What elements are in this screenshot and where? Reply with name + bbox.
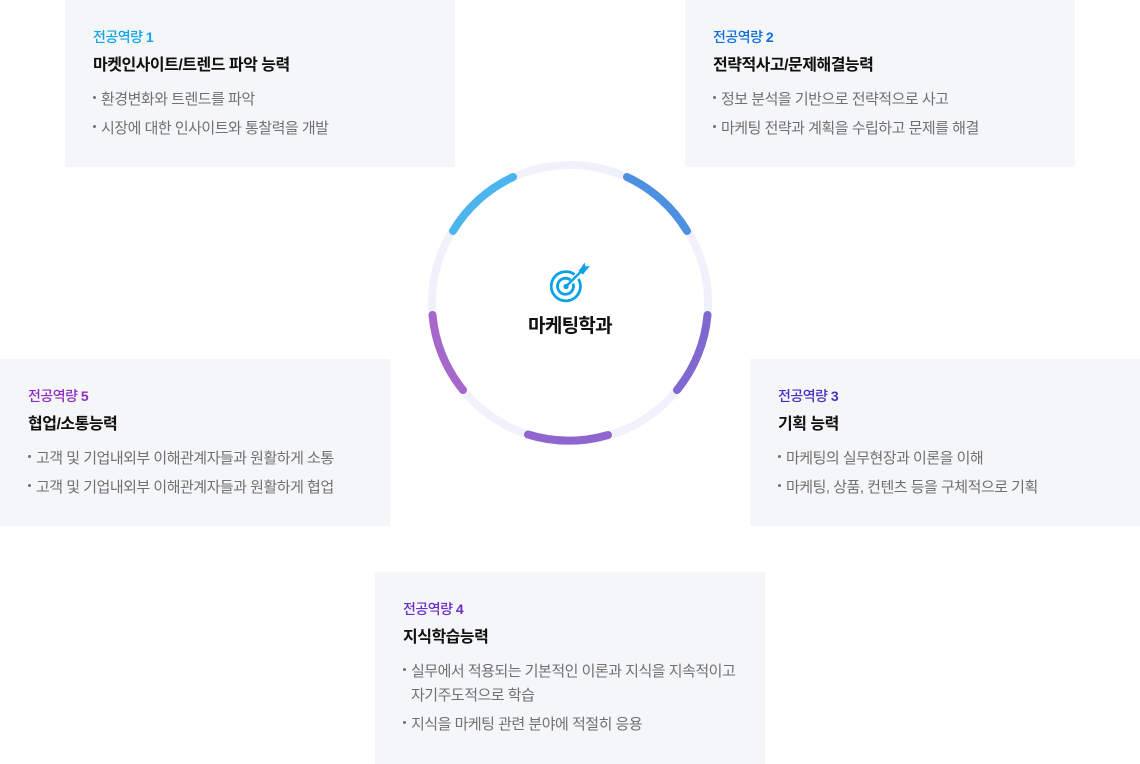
bullet: competency 4 first: 실무에서 적용되는 기본적인 이론과 지식을 지속적이고 — [411, 663, 735, 680]
panel: competency 1 — [65, 0, 455, 167]
label: competency 2: 전공역량 2 — [713, 29, 774, 45]
label: competency 1: 전공역량 1 — [93, 29, 154, 45]
ring segment 2 — [627, 177, 687, 231]
bullet: competency 4 second: 지식을 마케팅 관련 분야에 적절히 응용 — [411, 716, 642, 733]
panel: competency 5 — [0, 359, 390, 526]
ring segment 1 — [453, 177, 513, 231]
bullet: competency 1 second: 시장에 대한 인사이트와 통찰력을 개발 — [101, 120, 328, 137]
bullet: competency 5 first: 고객 및 기업내외부 이해관계자들과 원활하게 소통 — [36, 450, 334, 467]
heading: competency 4: 지식학습능력 — [403, 629, 488, 646]
bullet: competency 5 second: 고객 및 기업내외부 이해관계자들과 원활하게 협업 — [36, 479, 334, 496]
bullet: competency 4 first — [403, 660, 735, 708]
icon: target with arrow — [550, 262, 590, 302]
center title: 마케팅학과 — [528, 316, 612, 337]
heading: competency 5: 협업/소통능력 — [28, 416, 117, 433]
ring chart — [428, 161, 712, 445]
heading: competency 1: 마켓인사이트/트렌드 파악 능력 — [93, 57, 290, 74]
panel: competency 4 — [375, 572, 765, 764]
ring segment 5 — [432, 315, 463, 390]
panel: competency 3 — [750, 359, 1140, 526]
bullet: competency 1 first: 환경변화와 트렌드를 파악 — [101, 91, 255, 108]
label: competency 5: 전공역량 5 — [28, 388, 89, 404]
bullet: competency 2 first: 정보 분석을 기반으로 전략적으로 사고 — [721, 91, 948, 108]
ring segment 4 — [528, 434, 608, 441]
bullet: competency 2 second: 마케팅 전략과 계획을 수립하고 문제를 해결 — [721, 120, 979, 137]
heading: competency 3: 기획 능력 — [778, 416, 839, 433]
bullet: competency 3 second: 마케팅, 상품, 컨텐츠 등을 구체적으로 기획 — [786, 479, 1038, 496]
label: competency 4: 전공역량 4 — [403, 601, 464, 617]
bullet: competency 3 first: 마케팅의 실무현장과 이론을 이해 — [786, 450, 983, 467]
ring segment 3 — [677, 315, 708, 390]
label: competency 3: 전공역량 3 — [778, 388, 839, 404]
panel: competency 2 — [685, 0, 1075, 167]
heading: competency 2: 전략적사고/문제해결능력 — [713, 57, 873, 74]
bullet: competency 4 first: 자기주도적으로 학습 — [411, 687, 534, 704]
